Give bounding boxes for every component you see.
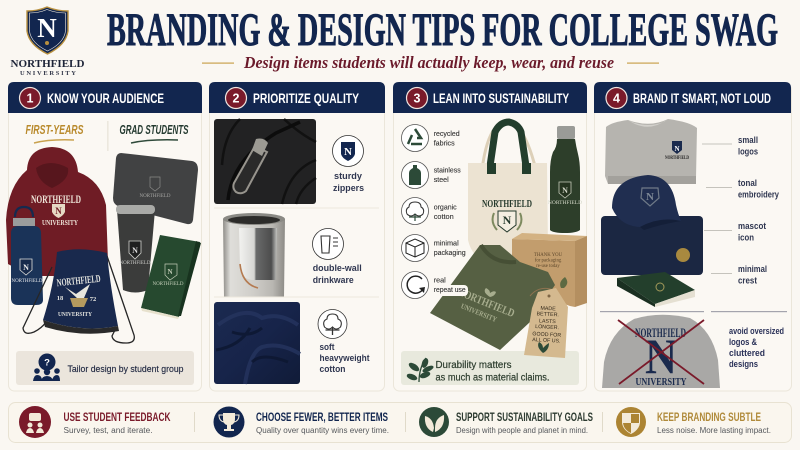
label: recycled fabrics: [434, 129, 460, 148]
grey folded sweatshirt: [605, 119, 697, 184]
icon: real repeat use: [402, 272, 428, 298]
logo: Northfield University: UNIVERSITY: [20, 70, 76, 77]
tumbler: NORTHFIELD: [119, 261, 151, 266]
drawstring bag: UNIVERSITY: [58, 311, 92, 318]
first-years label: [26, 122, 84, 143]
label: minimal packaging: minimal: [434, 238, 459, 248]
tip: keep branding subtle: Less noise. More lasting impact.: [657, 426, 771, 435]
kraft box: re-use today: [536, 264, 560, 269]
icon: recycled fabrics: [402, 124, 428, 152]
logo: Northfield University: [10, 7, 85, 77]
tip: support sustainability goals: SUPPORT SUSTAINABILITY GOALS: [456, 410, 593, 424]
grey folded sweatshirt: NORTHFIELD: [665, 156, 689, 161]
panel: prioritize quality: [209, 82, 385, 391]
panel: brand it smart: [594, 82, 792, 391]
navy water bottle: N: [23, 263, 29, 272]
panel header 4: 4: [613, 92, 620, 106]
green notebook: N: [167, 268, 173, 276]
label: recycled fabrics: recycled: [434, 129, 460, 138]
panel header 4: [594, 82, 791, 113]
panel header 1: [8, 82, 202, 113]
photo: double-wall tumbler: [223, 213, 285, 297]
grad students label: [120, 122, 189, 143]
tip: support sustainability goals: Design with people and planet in mind.: [456, 426, 588, 435]
navy water bottle: [11, 207, 43, 305]
panel: lean into sustainability: [393, 82, 587, 391]
tip: choose fewer, better items: [214, 406, 389, 438]
label: soft heavyweight cotton: cotton: [320, 364, 346, 375]
label: tonal embroidery: embroidery: [738, 190, 780, 200]
green hardcover book: [617, 272, 695, 307]
label: organic cotton: [434, 202, 457, 221]
tip: keep branding subtle: [616, 407, 771, 437]
subtitle: Design items students will actually keep, wear, and reuse: [243, 53, 614, 72]
icon: shield sturdy zippers: [332, 136, 364, 166]
label: mascot icon: mascot: [738, 221, 767, 232]
maroon hoodie: NORTHFIELD: [31, 192, 81, 206]
label: minimal packaging: [434, 238, 466, 257]
label: minimal crest: crest: [738, 276, 758, 286]
tailor callout: [16, 351, 194, 385]
red X: [618, 320, 704, 384]
label: small logos: logos: [738, 146, 758, 158]
label: double-wall drinkware: double-wall: [313, 263, 362, 274]
first-years label: FIRST-YEARS: [26, 122, 84, 137]
maroon hoodie: [6, 147, 108, 276]
drawstring bag: 72: [90, 296, 96, 303]
oversized logo sweatshirt crossed out: UNIVERSITY: [636, 377, 687, 388]
icon: double-wall drinkware: [312, 228, 344, 260]
durability callout: as much as material claims.: [436, 372, 550, 384]
hang tag: BETTER.: [536, 311, 559, 318]
durability callout: [401, 351, 579, 385]
logo: Northfield University: NORTHFIELD: [10, 58, 85, 70]
kraft box: THANK YOU: [534, 253, 562, 258]
icon: organic cotton: [402, 198, 428, 224]
label: mascot icon: icon: [738, 232, 754, 244]
hang tag: LASTS: [539, 318, 556, 325]
hang tag: LONGER.: [535, 324, 559, 331]
grad students label: GRAD STUDENTS: [120, 122, 189, 137]
maroon hoodie: UNIVERSITY: [42, 219, 78, 227]
label: stainless steel: stainless: [434, 166, 461, 174]
label: real repeat use: real: [434, 276, 446, 284]
hang tag: GOOD FOR: [532, 331, 561, 339]
label: minimal crest: [738, 264, 767, 286]
tumbler: [116, 205, 155, 292]
label: avoid oversized logos: logos &: [729, 337, 757, 348]
label: real repeat use: [431, 276, 468, 296]
navy cap: N: [646, 191, 654, 203]
label: sturdy zippers: sturdy: [334, 171, 363, 182]
label: stainless steel: [434, 166, 461, 184]
green notebook: [141, 235, 201, 319]
navy water bottle: NORTHFIELD: [11, 279, 43, 284]
tote bag: NORTHFIELD: [482, 199, 532, 210]
laptop sleeve: NORTHFIELD: [139, 194, 171, 199]
olive t-shirt: UNIVERSITY: [460, 301, 499, 324]
panel header 1: KNOW YOUR AUDIENCE: [47, 91, 164, 106]
olive t-shirt: [430, 245, 555, 350]
label: double-wall drinkware: drinkware: [313, 275, 354, 286]
green notebook: NORTHFIELD: [152, 282, 184, 287]
maroon hoodie: N: [55, 206, 62, 216]
label: tonal embroidery: tonal: [738, 178, 757, 189]
green bottle: [548, 126, 582, 233]
panel header 2: 2: [233, 92, 240, 106]
label: stainless steel: steel: [434, 175, 449, 184]
logo: Northfield University: N: [37, 13, 57, 43]
tailor callout: Tailor design by student group: [68, 364, 184, 375]
label: sturdy zippers: [333, 171, 364, 194]
label: soft heavyweight cotton: [320, 342, 370, 375]
label: small logos: small: [738, 135, 758, 146]
kraft box: for packaging: [535, 258, 562, 264]
label: soft heavyweight cotton: heavyweight: [320, 353, 370, 364]
photo: zipper: [214, 119, 316, 204]
panel header 2: PRIORITIZE QUALITY: [253, 91, 359, 106]
green bottle: N: [562, 186, 568, 195]
panel header 3: LEAN INTO SUSTAINABILITY: [433, 91, 569, 106]
drawstring bag: NORTHFIELD: [56, 274, 101, 289]
oversized logo sweatshirt crossed out: [602, 315, 720, 388]
oversized logo sweatshirt crossed out: NORTHFIELD: [635, 325, 686, 340]
panel header 1: 1: [27, 92, 34, 106]
label: soft heavyweight cotton: soft: [320, 342, 335, 353]
label: double-wall drinkware: [313, 263, 362, 286]
panel header 3: 3: [414, 92, 421, 106]
tip: choose fewer, better items: CHOOSE FEWER, BETTER ITEMS: [256, 410, 388, 424]
drawstring bag: 18: [57, 295, 64, 302]
laptop sleeve: [113, 153, 198, 224]
photo: navy cotton fabric: [214, 302, 300, 384]
label: small logos: [738, 135, 758, 158]
tip: choose fewer, better items: Quality over quantity wins every time.: [256, 426, 389, 435]
icon: stainless steel: [402, 162, 428, 188]
tote bag: [468, 122, 548, 262]
panel header 3: [393, 82, 587, 113]
label: sturdy zippers: zippers: [333, 183, 364, 194]
tailor callout: ?: [44, 358, 50, 368]
navy cap: [612, 175, 681, 230]
label: avoid oversized logos: [729, 326, 784, 370]
panel: know your audience: [6, 82, 202, 391]
icon: leaf sprig: [406, 357, 434, 382]
label: avoid oversized logos: avoid oversized: [729, 326, 784, 337]
hang tag: MADE: [540, 306, 556, 312]
drawstring bag: [23, 249, 134, 343]
durability callout: Durability matters: [436, 360, 512, 371]
grey folded sweatshirt: N: [674, 145, 680, 153]
olive t-shirt: NORTHFIELD: [456, 286, 516, 320]
tip: support sustainability goals: [419, 407, 593, 437]
green bottle: NORTHFIELD: [548, 200, 582, 206]
label: tonal embroidery: [738, 178, 780, 200]
tumbler: N: [132, 246, 138, 255]
icon: minimal packaging: [402, 234, 428, 262]
icon: cotton: [318, 310, 347, 338]
label: avoid oversized logos: cluttered: [729, 348, 765, 359]
label: organic cotton: cotton: [434, 212, 454, 221]
label: recycled fabrics: fabrics: [434, 138, 455, 148]
tip: use student feedback: Survey, test, and iterate.: [64, 426, 152, 435]
icon: student group: [33, 354, 60, 381]
label: avoid oversized logos: designs: [729, 359, 758, 370]
label: minimal packaging: packaging: [434, 248, 466, 257]
label: minimal crest: minimal: [738, 264, 767, 275]
tote bag: N: [503, 213, 512, 227]
tip: use student feedback: USE STUDENT FEEDBACK: [64, 410, 171, 424]
icon: shield sturdy zippers: N: [344, 146, 352, 158]
oversized logo sweatshirt crossed out: N: [645, 328, 677, 384]
label: mascot icon: [738, 221, 767, 244]
panel header 2: [209, 82, 385, 113]
bottom tips bar: [8, 402, 792, 442]
hang tag: ALL OF US.: [532, 337, 561, 345]
kraft box: [512, 233, 587, 307]
hang tag: [524, 288, 568, 358]
tip: use student feedback: [19, 406, 171, 438]
label: real repeat use: repeat use: [434, 285, 466, 294]
navy pouch: [601, 216, 703, 275]
label: organic cotton: organic: [434, 202, 457, 212]
